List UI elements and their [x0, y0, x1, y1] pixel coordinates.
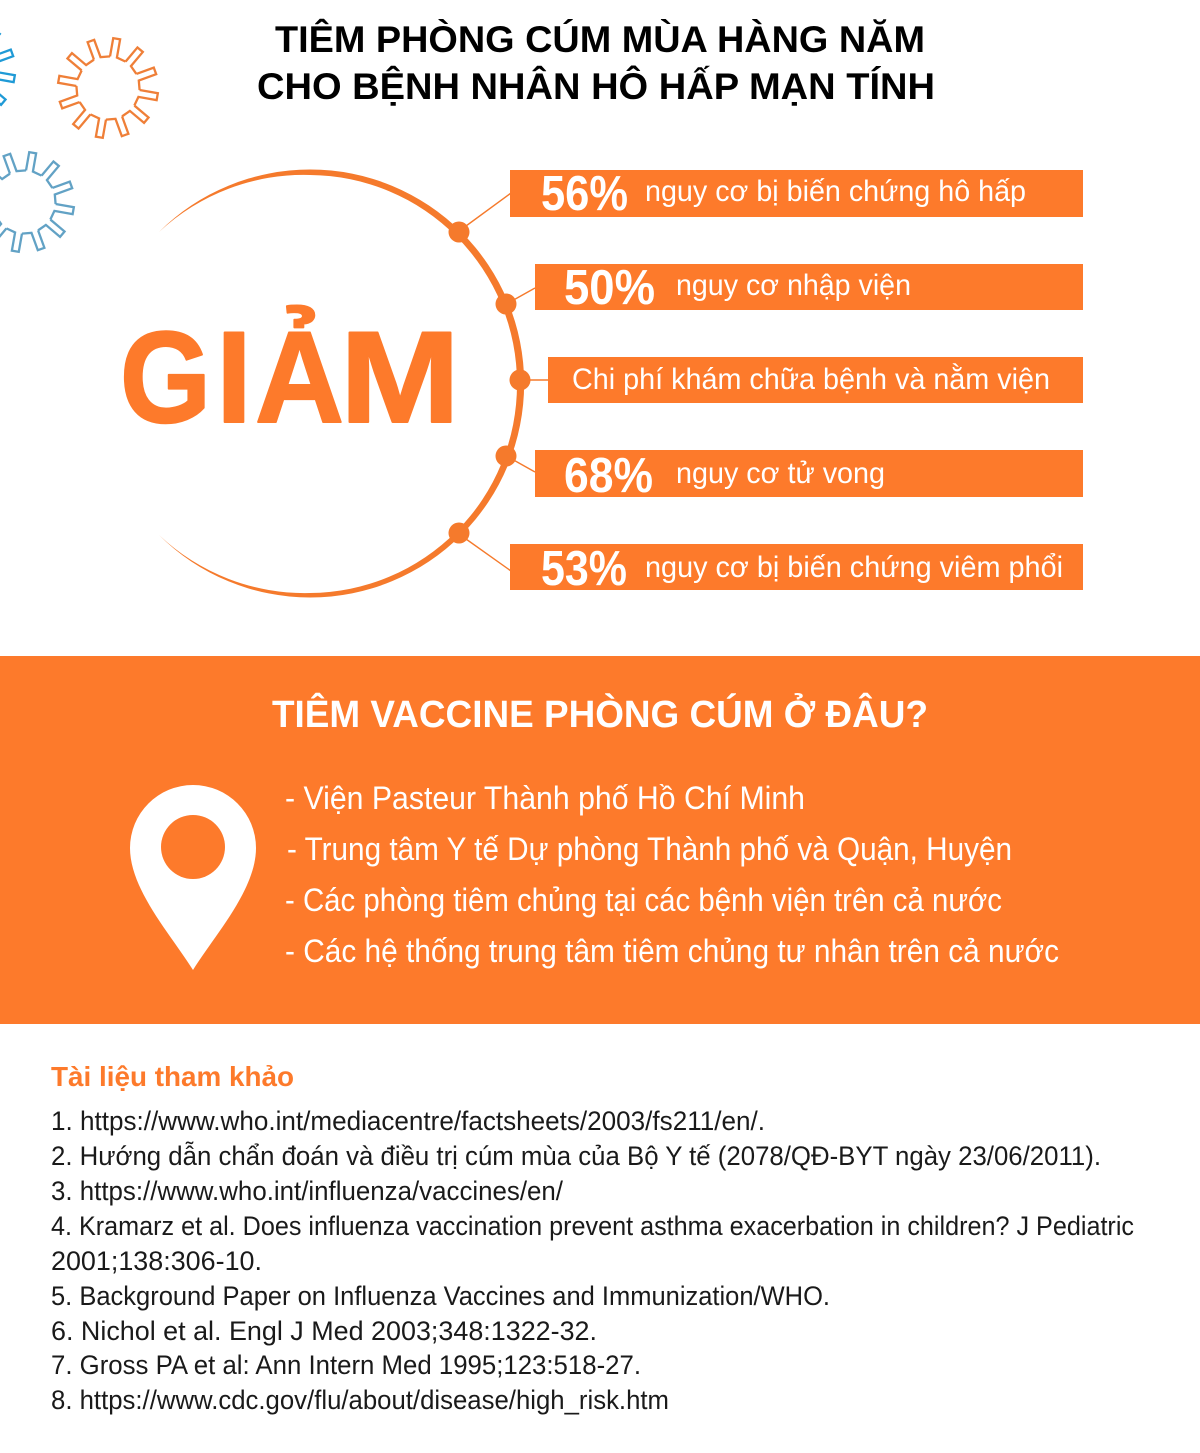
stat bar: 56%: nguy cơ bị biến chứng hô hấp [645, 175, 1026, 208]
stat bar: 56%: 56% [541, 167, 628, 221]
list of vaccination locations: - Các phòng tiêm chủng tại các bệnh viện trên cả nước [285, 882, 1002, 918]
heading: GIẢM: I [216, 304, 252, 450]
heading: GIẢM: M [340, 304, 460, 450]
icon: blue-grey virus gear [0, 144, 82, 260]
references list: 1. https://www.who.int/mediacentre/factsheets/2003/fs211/en/. [51, 1106, 765, 1136]
stat bar: 53%: 53% [541, 542, 627, 596]
stat bar: 50%: nguy cơ nhập viện [676, 269, 911, 302]
list of vaccination locations: - Viện Pasteur Thành phố Hồ Chí Minh [285, 780, 805, 816]
icon: orange virus gear [50, 30, 166, 146]
references list: 3. https://www.who.int/influenza/vaccines/en/ [51, 1176, 563, 1206]
panel heading: TIÊM VACCINE PHÒNG CÚM Ở ĐÂU? [272, 692, 928, 736]
list of vaccination locations: - Các hệ thống trung tâm tiêm chủng tư nhân trên cả nước [285, 933, 1059, 969]
icon: cyan virus gear [0, 12, 23, 128]
references list: 8. https://www.cdc.gov/flu/about/disease/high_risk.htm [51, 1385, 669, 1415]
list of vaccination locations: - Trung tâm Y tế Dự phòng Thành phố và Quận, Huyện [287, 831, 1012, 867]
stat bar: 50%: 50% [564, 261, 655, 315]
heading: GIẢM: Ả [255, 304, 344, 450]
stat bar: 68% [535, 449, 1083, 503]
references list: 2001;138:306-10. [51, 1246, 262, 1276]
stat bar: 53% [510, 542, 1083, 596]
stat bar: 68%: 68% [564, 449, 653, 503]
stat bar: 53%: nguy cơ bị biến chứng viêm phổi [645, 551, 1063, 584]
heading: GIẢM: G [120, 304, 211, 450]
references heading: Tài liệu tham khảo [51, 1061, 294, 1092]
references list: 7. Gross PA et al: Ann Intern Med 1995;123:518-27. [51, 1350, 641, 1380]
stat bar: hospital costs [548, 357, 1083, 403]
references list: 5. Background Paper on Influenza Vaccines and Immunization/WHO. [51, 1281, 830, 1311]
panel: where to get vaccinated [0, 656, 1200, 1024]
title: CHO BỆNH NHÂN HÔ HẤP MẠN TÍNH [257, 65, 935, 107]
list of vaccination locations [285, 780, 1059, 969]
references list [51, 1106, 1134, 1415]
references list: 2. Hướng dẫn chẩn đoán và điều trị cúm mùa của Bộ Y tế (2078/QĐ-BYT ngày 23/06/2011). [51, 1140, 1101, 1171]
stat bar: 56% [510, 167, 1083, 221]
stat bar: hospital costs: Chi phí khám chữa bệnh và nằm viện [572, 363, 1050, 396]
icon: location pin [130, 785, 256, 970]
title [257, 18, 935, 107]
stat bar: 68%: nguy cơ tử vong [676, 457, 885, 490]
references list: 6. Nichol et al. Engl J Med 2003;348:1322-32. [51, 1316, 597, 1346]
stat bar: 50% [535, 261, 1083, 315]
circular arc with connector dots [159, 169, 548, 598]
title: TIÊM PHÒNG CÚM MÙA HÀNG NĂM [275, 18, 925, 60]
references list: 4. Kramarz et al. Does influenza vaccination prevent asthma exacerbation in children? J Pediatric [51, 1211, 1134, 1241]
